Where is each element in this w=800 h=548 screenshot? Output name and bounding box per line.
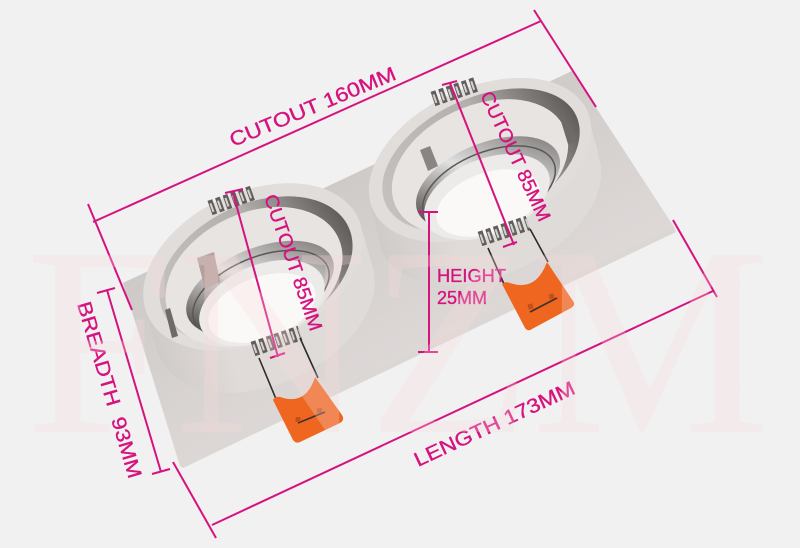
product: double ceiling light fitting [116, 45, 676, 468]
dimension: cutout 85 right [442, 81, 517, 247]
dimension: height [418, 212, 438, 352]
label: cutout 85mm left: CUTOUT 85MM [259, 192, 326, 334]
label: breadth 93mm: BREADTH 93MM [72, 299, 145, 481]
dimension: cutout 160 [88, 10, 596, 310]
metal clip [420, 146, 438, 171]
orange tab left [273, 377, 343, 443]
dimension: breadth [97, 288, 170, 474]
label: cutout 160mm: CUTOUT 160MM [226, 63, 399, 152]
lamp ring left [116, 150, 402, 426]
orange tab right [502, 262, 574, 330]
clip wires [259, 229, 548, 399]
label: cutout 85mm right: CUTOUT 85MM [475, 88, 554, 225]
label: height value: 25MM [437, 288, 487, 308]
label: height: HEIGHT [437, 266, 506, 286]
watermark: FNZM [25, 192, 770, 491]
springs [210, 84, 528, 349]
dimension: cutout 85 left [225, 189, 285, 358]
mounting plate [123, 71, 676, 468]
lamp ring right [343, 45, 627, 318]
label: length 173mm: LENGTH 173MM [411, 378, 579, 472]
metal clip [197, 252, 220, 289]
dimension: length [173, 220, 717, 538]
